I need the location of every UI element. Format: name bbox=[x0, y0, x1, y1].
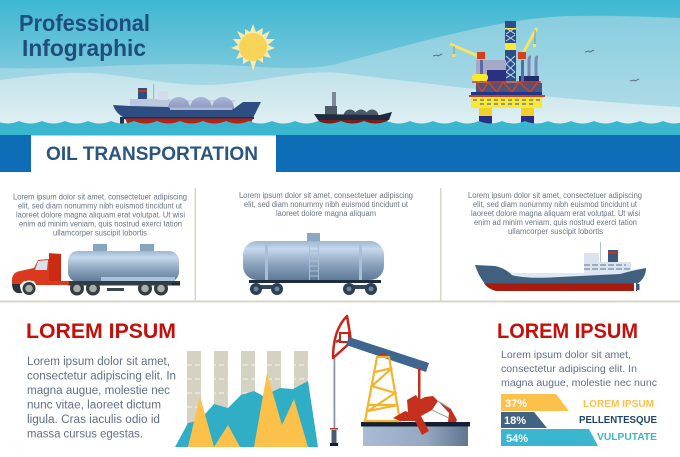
heading: lorem ipsum left: LOREM IPSUM bbox=[26, 319, 176, 343]
text: column 1 bbox=[13, 192, 187, 238]
title: Professional bbox=[19, 10, 150, 36]
text block right: Lorem ipsum dolor sit amet, bbox=[501, 349, 631, 361]
oil platform bbox=[450, 21, 545, 124]
stats: 37% lorem ipsum: LOREM IPSUM bbox=[583, 399, 654, 410]
stats: 37% lorem ipsum bbox=[501, 394, 654, 411]
sea bbox=[0, 121, 680, 136]
sky background bbox=[0, 0, 680, 124]
text block right: consectetur adipiscing elit. In bbox=[501, 363, 637, 375]
text block left: Lorem ipsum dolor sit amet, bbox=[27, 356, 170, 368]
text block left: massa cursus egestas. bbox=[27, 428, 143, 440]
area chart bbox=[175, 351, 318, 447]
text block left: ligula. Cras iaculis odio id bbox=[27, 414, 160, 426]
icon: pumpjack bbox=[330, 316, 470, 446]
icon: sun bbox=[231, 24, 275, 71]
stats: 37% lorem ipsum: 37% bbox=[505, 398, 527, 410]
stats: 18% pellentesque: PELLENTESQUE bbox=[579, 415, 657, 426]
text block left: magna augue, molestie nec bbox=[27, 385, 170, 397]
stats: 54% vulputate: VULPUTATE bbox=[597, 431, 657, 443]
text: column 2 bbox=[239, 191, 413, 218]
text: column 3 bbox=[468, 191, 642, 236]
text block right: magna augue, molestie nec nunc bbox=[501, 377, 657, 389]
text: column 1: elit, sed diam nonummy nibh euismod tincidunt ut bbox=[18, 202, 183, 210]
text block left: nunc vitae, laoreet dictum bbox=[27, 400, 161, 412]
text block right bbox=[501, 349, 657, 389]
LNG carrier bbox=[113, 84, 261, 125]
dividers bbox=[0, 188, 680, 302]
title bbox=[19, 10, 150, 61]
heading: oil transportation: OIL TRANSPORTATION bbox=[46, 143, 258, 165]
text: column 3: ullamcorper suscipit lobortis bbox=[508, 227, 603, 236]
text: column 2: laoreet dolore magna aliquam bbox=[276, 209, 376, 218]
text: column 3: laoreet dolore magna aliquam erat volutpat. Ut wisi bbox=[471, 209, 640, 218]
icon: oil tanker ship bbox=[475, 242, 646, 292]
text: column 3: elit, sed diam nonummy nibh euismod tincidunt ut bbox=[473, 200, 638, 209]
small distant ship bbox=[314, 92, 392, 125]
icon: rail tank car bbox=[243, 233, 384, 295]
text: column 1: laoreet dolore magna aliquam erat volutpat. Ut wisi bbox=[16, 210, 185, 220]
text: column 2: elit, sed diam nonummy nibh euismod tincidunt ut bbox=[244, 200, 409, 209]
icon: tanker truck bbox=[12, 244, 180, 296]
text block left: consectetur adipiscing elit. In bbox=[27, 370, 176, 382]
banner band bbox=[0, 134, 680, 172]
text block left bbox=[27, 356, 176, 440]
heading: lorem ipsum right: LOREM IPSUM bbox=[497, 320, 638, 343]
text: column 2: Lorem ipsum dolor sit amet, consectetuer adipiscing bbox=[239, 191, 413, 200]
stats: 18% pellentesque: 18% bbox=[504, 415, 526, 427]
text: column 1: ullamcorper suscipit lobortis bbox=[53, 228, 147, 238]
stats: 18% pellentesque bbox=[501, 412, 657, 428]
text: column 3: enim ad minim veniam, quis nostrud exerci tation bbox=[474, 218, 637, 227]
title: Infographic bbox=[22, 35, 146, 61]
stats: 54% vulputate: 54% bbox=[506, 433, 528, 445]
text: column 1: Lorem ipsum dolor sit amet, consectetuer adipiscing bbox=[13, 192, 187, 202]
text: column 1: enim ad minim veniam, quis nostrud exerci tation bbox=[19, 220, 182, 228]
stats: 54% vulputate bbox=[501, 429, 657, 446]
text: column 3: Lorem ipsum dolor sit amet, consectetuer adipiscing bbox=[468, 191, 642, 200]
icon: birds bbox=[433, 50, 639, 81]
